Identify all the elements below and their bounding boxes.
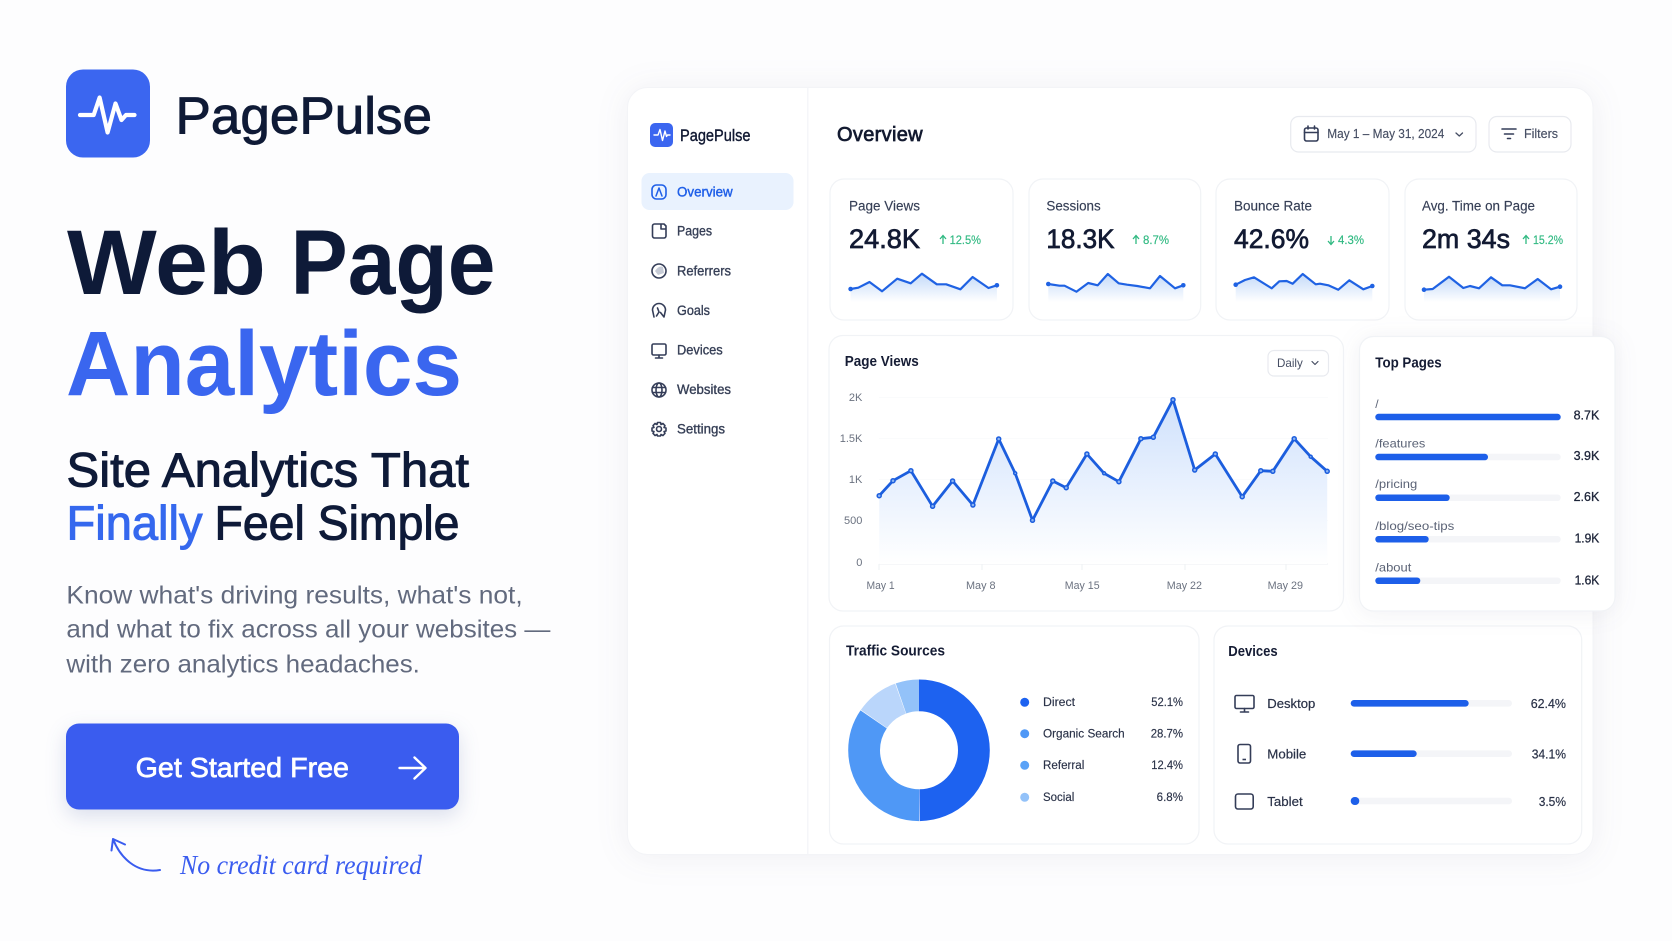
panel: traffic sources: Traffic Sources	[846, 644, 945, 660]
line chart: 1K	[849, 474, 863, 486]
daily dropdown	[1268, 350, 1328, 376]
headline: Web	[67, 212, 266, 314]
donut legend: Direct	[1043, 697, 1076, 709]
panel: top pages	[1360, 336, 1615, 611]
page row: /about: 1.6K	[1575, 573, 1600, 588]
panel: devices: Devices	[1228, 644, 1278, 660]
nav item: Pages: Pages	[677, 224, 712, 239]
arrow: curved pointer to button	[112, 839, 160, 871]
page row: /about: /about	[1375, 561, 1412, 575]
stat card: Page Views: Page Views	[849, 199, 920, 214]
stat card: Bounce Rate: 4.3%	[1338, 235, 1364, 247]
donut chart	[864, 695, 974, 805]
nav item: Settings	[652, 422, 725, 437]
panel: page views chart	[829, 336, 1344, 611]
subheadline	[66, 445, 469, 550]
description paragraph: and what to fix across all your websites —	[66, 616, 550, 644]
line chart: May 29	[1268, 580, 1303, 592]
device row: Desktop: Desktop	[1267, 696, 1315, 711]
subheadline: Feel Simple	[214, 497, 460, 550]
headline: Analytics	[66, 313, 462, 415]
no credit card note: No credit card required	[179, 850, 422, 880]
stat card: Sessions	[1029, 179, 1201, 320]
device row: Mobile: Mobile	[1267, 746, 1306, 761]
sidebar logo: PagePulse	[680, 127, 750, 145]
icon: button arrow	[400, 758, 426, 778]
donut legend: Referral	[1043, 760, 1084, 772]
call to action button: Get Started Free	[136, 752, 349, 783]
brand name: PagePulse	[176, 87, 432, 145]
panel: dashboard window	[628, 88, 1593, 854]
device row: Tablet	[1236, 794, 1566, 809]
line chart: May 15	[1065, 580, 1100, 592]
page row: /pricing: 2.6K	[1574, 489, 1600, 504]
page row: /blog/seo-tips: 1.9K	[1575, 531, 1600, 546]
nav item: Websites: Websites	[677, 382, 731, 397]
donut legend: 6.8%	[1157, 792, 1183, 804]
nav item: Overview	[642, 173, 794, 210]
description paragraph: with zero analytics headaches.	[65, 650, 420, 678]
stat card: Sessions: Sessions	[1046, 199, 1101, 214]
description paragraph	[65, 581, 550, 678]
daily dropdown: Daily	[1277, 356, 1303, 370]
line chart: 500	[844, 515, 862, 527]
nav item: Websites	[652, 382, 731, 397]
line chart: May 1	[866, 580, 895, 592]
stat card: Avg. Time on Page: 2m 34s	[1422, 224, 1510, 254]
stat card: Bounce Rate: 42.6%	[1234, 224, 1309, 254]
filters button: Filters	[1524, 127, 1558, 141]
nav item: Devices: Devices	[677, 343, 723, 358]
page row: /features	[1375, 437, 1600, 463]
page row: /pricing	[1375, 477, 1600, 504]
page row: /: /	[1375, 397, 1379, 411]
subheadline: Site Analytics That	[66, 445, 469, 498]
call to action button	[66, 724, 459, 810]
line chart: 0	[856, 557, 862, 569]
nav item: Settings: Settings	[677, 422, 725, 437]
date range button: May 1 – May 31, 2024	[1327, 127, 1444, 141]
device row: Mobile: 34.1%	[1532, 746, 1566, 761]
stat card: Avg. Time on Page: 15.2%	[1533, 235, 1563, 247]
device row: Mobile	[1238, 744, 1566, 763]
line chart: 1.5K	[840, 433, 863, 445]
date range button	[1291, 116, 1476, 152]
page row: /about	[1375, 561, 1600, 588]
stat card: Avg. Time on Page: Avg. Time on Page	[1422, 199, 1535, 214]
line chart: May 22	[1167, 580, 1202, 592]
stat card: Bounce Rate: Bounce Rate	[1234, 199, 1312, 214]
filters button	[1489, 116, 1571, 152]
page row: /: 8.7K	[1574, 407, 1600, 422]
line chart: 2K	[849, 392, 863, 404]
device row: Desktop: 62.4%	[1531, 696, 1566, 711]
device row: Desktop	[1235, 696, 1566, 712]
page row: /features: 3.9K	[1574, 448, 1600, 463]
nav item: Goals: Goals	[677, 303, 710, 318]
stat card: Page Views: 24.8K	[849, 224, 920, 254]
page row: /blog/seo-tips: /blog/seo-tips	[1375, 519, 1454, 533]
device row: Tablet: 3.5%	[1539, 794, 1566, 809]
description paragraph: Know what's driving results, what's not,	[66, 581, 523, 609]
donut legend: Organic Search	[1043, 728, 1125, 740]
donut legend: 12.4%	[1151, 760, 1183, 772]
panel: top pages: Top Pages	[1375, 356, 1442, 372]
donut legend: 28.7%	[1151, 728, 1183, 740]
page row: /	[1375, 397, 1600, 422]
stat card: Bounce Rate	[1216, 179, 1389, 320]
stat card: Avg. Time on Page	[1405, 179, 1577, 320]
subheadline: Finally	[66, 497, 202, 550]
page row: /pricing: /pricing	[1375, 477, 1417, 491]
nav item: Goals	[652, 303, 710, 318]
line chart: May 8	[966, 580, 996, 592]
brand logo	[66, 70, 150, 158]
page row: /blog/seo-tips	[1375, 519, 1600, 546]
nav item: Overview: Overview	[677, 184, 733, 200]
page title: Overview	[837, 124, 923, 146]
sidebar logo	[650, 123, 750, 147]
stat card: Sessions: 8.7%	[1143, 235, 1169, 247]
page row: /features: /features	[1375, 437, 1425, 451]
donut legend	[1020, 697, 1183, 804]
headline: Page	[290, 212, 496, 314]
donut legend: Social	[1043, 792, 1074, 804]
donut legend: 52.1%	[1151, 697, 1183, 709]
device row: Tablet: Tablet	[1267, 794, 1303, 809]
sidebar navigation	[642, 173, 794, 437]
stat card: Page Views	[830, 179, 1013, 320]
panel: devices	[1214, 626, 1582, 844]
nav item: Referrers	[652, 263, 731, 278]
stat card: Page Views: 12.5%	[950, 235, 981, 247]
nav item: Pages	[652, 224, 712, 239]
panel: traffic sources	[830, 626, 1199, 844]
stat card: Sessions: 18.3K	[1046, 224, 1115, 254]
panel: page views chart: Page Views	[845, 354, 919, 370]
nav item: Devices	[652, 343, 723, 358]
headline	[66, 212, 496, 415]
nav item: Referrers: Referrers	[677, 263, 731, 278]
line chart	[840, 392, 1329, 592]
